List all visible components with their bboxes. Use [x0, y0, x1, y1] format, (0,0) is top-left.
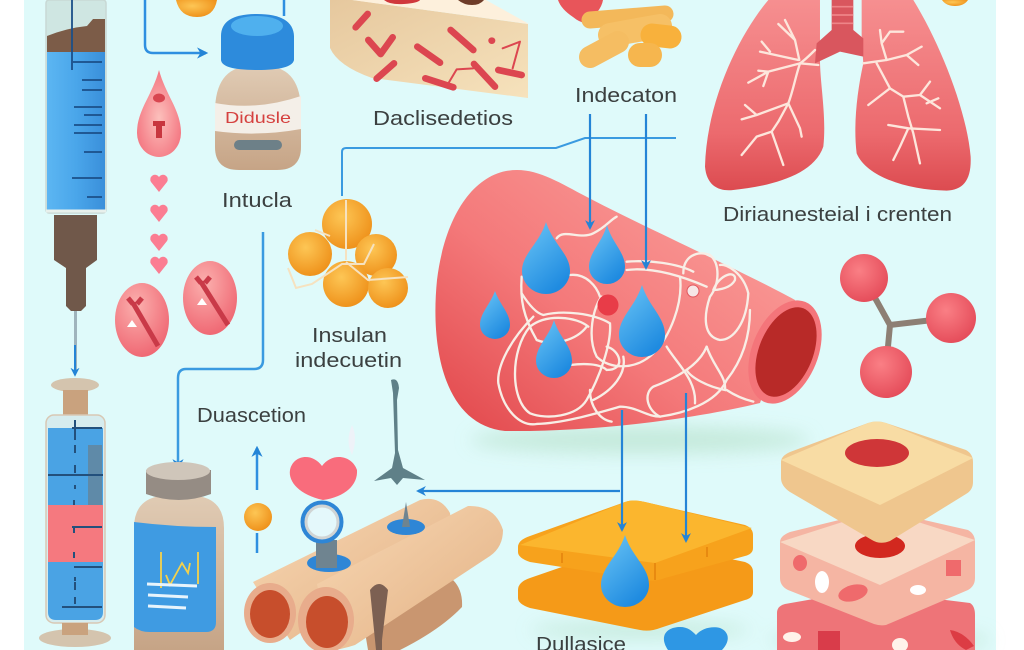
icon: blue heart bottom — [664, 627, 728, 650]
icon: small orange dot with arrows — [244, 448, 272, 553]
icon: orange capsule cluster — [590, 14, 670, 57]
icon: orange cell cluster — [288, 199, 408, 308]
icon: medicine bottle — [134, 462, 224, 650]
label: Indecaton: Indecaton — [575, 85, 677, 107]
arrow: down arrow to gold tiles 2 — [685, 393, 687, 541]
icon: top orange ball — [176, 0, 217, 17]
arrow: connector to orange cluster — [342, 138, 676, 196]
icon: lower syringe — [39, 378, 111, 647]
label: Diriaunesteial i crenten: Diriaunesteial i crenten — [723, 204, 952, 226]
arrow: top right connector — [283, 0, 285, 16]
icon: upper syringe — [46, 0, 106, 375]
icon: heart and ring — [290, 425, 357, 572]
icon: grey pin on tube — [387, 502, 425, 535]
icon: chart on bottle label — [161, 552, 198, 588]
label: Intucla: Intucla — [222, 190, 293, 212]
arrow: down arrow into organ 2 — [645, 114, 647, 268]
icon: cheese tissue wedge — [330, 0, 529, 98]
arrow: line down to bottle — [178, 232, 263, 468]
arrow: down arrow into organ 1 — [589, 114, 591, 228]
arrow: down arrow to gold tiles 1 — [621, 410, 623, 530]
label: Daclisedetios: Daclisedetios — [373, 108, 513, 130]
label: Insulan indecuetin: indecuetin — [295, 350, 402, 372]
icon: vial with label — [215, 14, 301, 170]
icon: column of hearts — [150, 175, 168, 274]
icon: water drop on gold tiles — [601, 535, 649, 607]
label: Insulan indecuetin: Insulan — [312, 325, 387, 347]
icon: grey pin tool — [374, 379, 425, 485]
water drops — [480, 222, 665, 378]
icon: left egg cell — [115, 283, 169, 357]
label: Insulan indecuetin — [295, 325, 402, 372]
label: Duascetion: Duascetion — [197, 405, 306, 427]
icon: right egg cell — [183, 261, 237, 335]
icon: layered block stack — [777, 422, 975, 650]
icon: molecule — [840, 254, 976, 398]
icon: central organ — [435, 170, 836, 431]
icon: top right orange ball — [942, 0, 968, 6]
icon: red drop — [137, 70, 181, 157]
icon: lungs — [705, 0, 971, 191]
icon: gold tiles with drop — [518, 500, 753, 631]
vial label text: Didusle — [225, 110, 291, 127]
arrow: left arrow to tubes — [418, 490, 620, 492]
icon: tan tubes — [244, 499, 503, 650]
icon: red heart shape top — [558, 0, 603, 23]
arrow: top connector to vial — [145, 0, 206, 53]
